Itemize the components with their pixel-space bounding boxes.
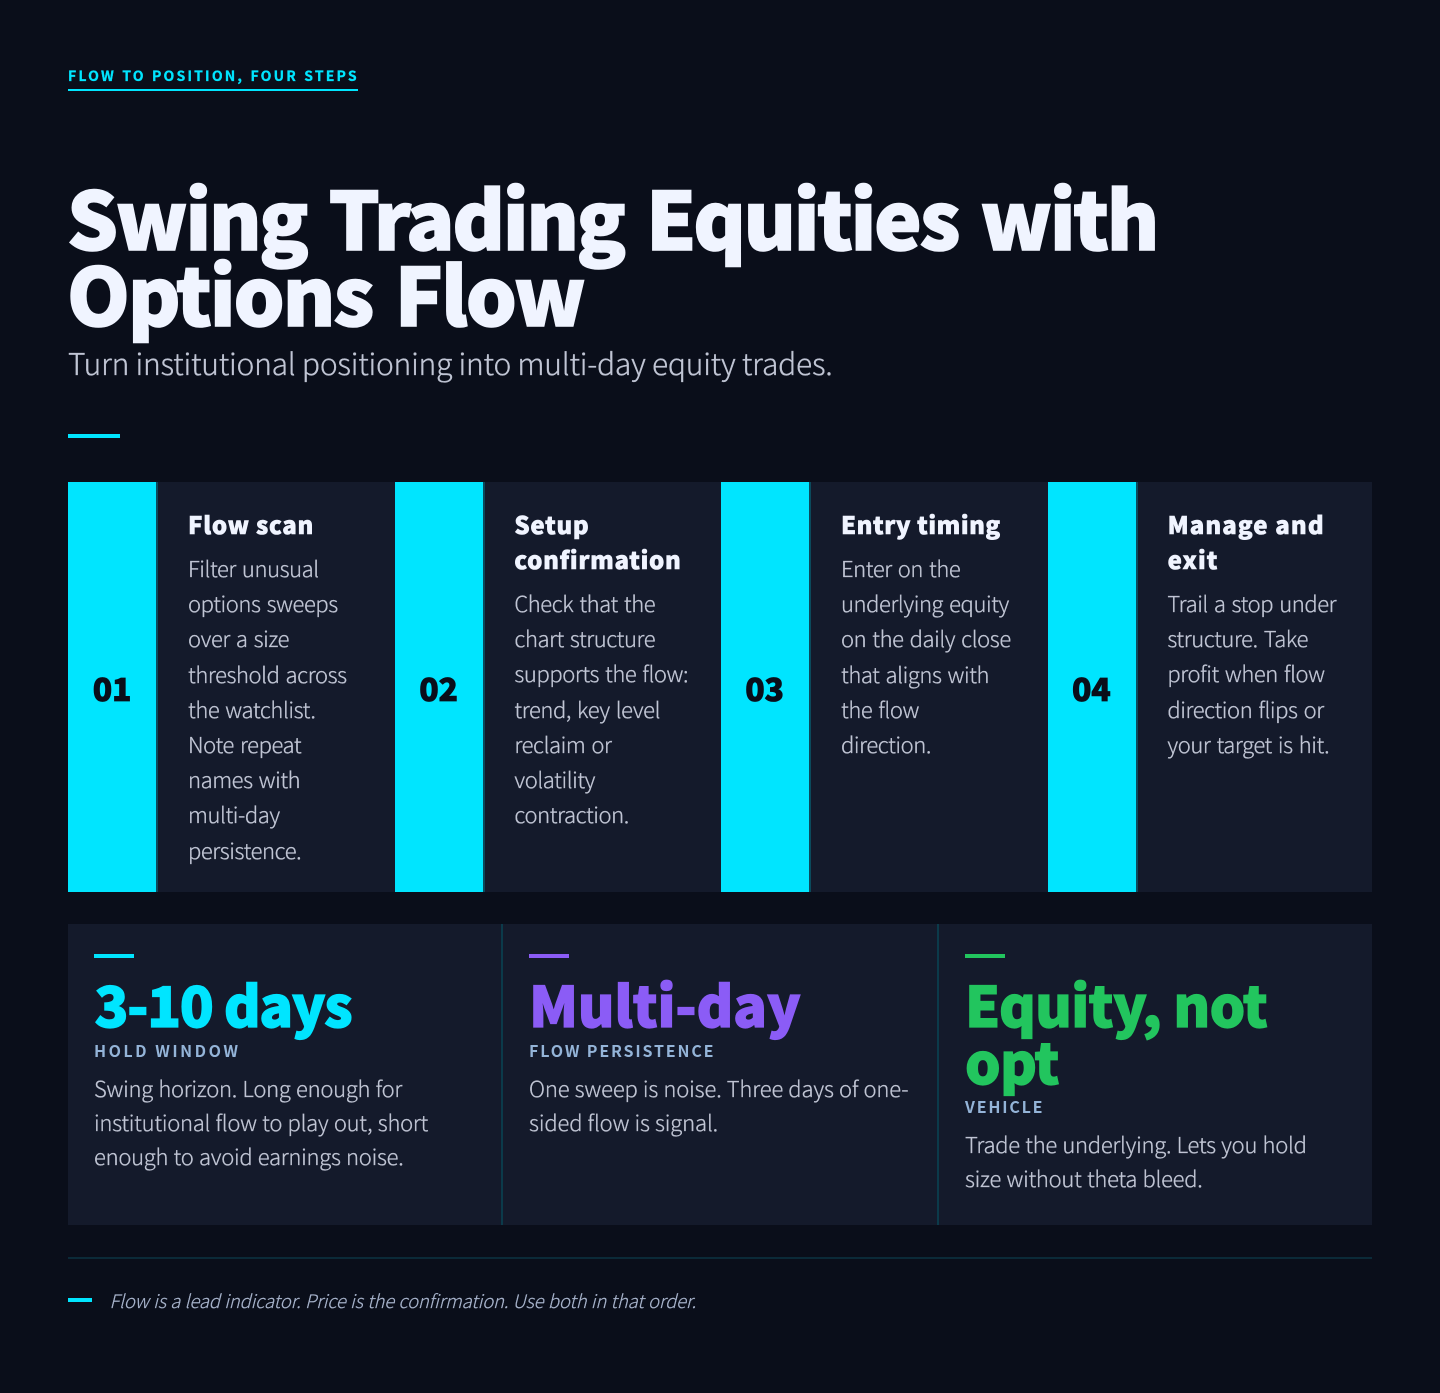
stat 3 value bbox=[965, 963, 1268, 1101]
step 2 text: reclaim or bbox=[514, 728, 612, 760]
step 4 card bbox=[1048, 482, 1372, 892]
step 2 card bbox=[395, 482, 721, 892]
step 2 text: contraction. bbox=[514, 798, 629, 830]
step 2 text: chart structure bbox=[514, 622, 655, 654]
step 1 heading: Flow scan bbox=[188, 506, 314, 541]
step 1 text: persistence. bbox=[188, 834, 301, 866]
step 4 text: profit when flow bbox=[1167, 657, 1325, 689]
step 4 heading bbox=[1168, 506, 1325, 576]
step 1 text: over a size bbox=[188, 622, 289, 654]
stat 2 text: sided flow is signal. bbox=[529, 1106, 718, 1138]
step 2 heading: Setup bbox=[514, 506, 589, 541]
title: Swing Trading Equities with bbox=[67, 158, 1157, 274]
accent rule bbox=[68, 434, 120, 438]
stat 2 label: FLOW PERSISTENCE bbox=[529, 1038, 715, 1062]
step 3 card bbox=[721, 482, 1048, 892]
eyebrow label: FLOW TO POSITION, FOUR STEPS bbox=[68, 66, 359, 86]
stat 3 text bbox=[965, 1128, 1307, 1194]
step 4 text bbox=[1167, 587, 1337, 760]
step 1 number: 01 bbox=[93, 665, 131, 711]
step 4 heading: exit bbox=[1168, 541, 1219, 576]
stat 2: flow persistence bbox=[529, 954, 908, 1138]
step 1 text: names with bbox=[188, 763, 300, 795]
stats panel bbox=[68, 924, 1372, 1225]
step 2 text: Check that the bbox=[514, 587, 655, 619]
step 2 text: supports the flow: bbox=[514, 657, 688, 689]
step 4 text: direction flips or bbox=[1167, 692, 1324, 724]
step 1 text: Filter unusual bbox=[188, 552, 319, 584]
title: Options Flow bbox=[67, 234, 584, 350]
step 1 text: the watchlist. bbox=[188, 693, 315, 725]
step 2 number bbox=[395, 482, 485, 892]
step 1 text: threshold across bbox=[188, 658, 347, 690]
step 3 text: the flow bbox=[841, 693, 919, 725]
step 2 text: volatility bbox=[514, 763, 595, 795]
step 1 text: Note repeat bbox=[188, 728, 301, 760]
stat 1 value: 3-10 days bbox=[94, 963, 351, 1044]
step 1 number bbox=[68, 482, 158, 892]
step 1 text bbox=[188, 552, 347, 866]
step 4 text: structure. Take bbox=[1167, 622, 1308, 654]
step 4 text: Trail a stop under bbox=[1167, 587, 1336, 619]
step 2 heading: confirmation bbox=[514, 541, 681, 576]
step 3 text: underlying equity bbox=[841, 587, 1009, 619]
stat 1 text: enough to avoid earnings noise. bbox=[94, 1140, 403, 1172]
title bbox=[67, 158, 1157, 350]
step 3 heading: Entry timing bbox=[841, 506, 1001, 541]
step 2 heading bbox=[514, 506, 681, 576]
stat 2 text bbox=[529, 1072, 908, 1138]
stat 3 text: Trade the underlying. Lets you hold bbox=[965, 1128, 1307, 1160]
stat 3 value: opt bbox=[965, 1020, 1059, 1101]
step 3 text: on the daily close bbox=[841, 622, 1011, 654]
step 2 text: trend, key level bbox=[514, 692, 660, 724]
stat 3 value: Equity, not bbox=[965, 963, 1267, 1044]
step 3 text: direction. bbox=[841, 728, 931, 760]
step 3 text: that aligns with bbox=[841, 658, 989, 690]
stat 3 text: size without theta bleed. bbox=[965, 1162, 1202, 1194]
stat 3 label: VEHICLE bbox=[965, 1094, 1044, 1118]
step 3 text bbox=[841, 552, 1011, 760]
stat 1 text: institutional flow to play out, short bbox=[94, 1106, 428, 1138]
step 1 text: options sweeps bbox=[188, 587, 338, 619]
step 4 number bbox=[1048, 482, 1138, 892]
step 2 number: 02 bbox=[419, 665, 458, 711]
step 1 text: multi-day bbox=[188, 798, 280, 830]
stat 2 text: One sweep is noise. Three days of one- bbox=[529, 1072, 908, 1104]
stat 2 value: Multi-day bbox=[529, 963, 800, 1044]
step 3 number bbox=[721, 482, 811, 892]
step 3 text: Enter on the bbox=[841, 552, 960, 584]
step 4 number: 04 bbox=[1072, 665, 1110, 711]
stat 1 text: Swing horizon. Long enough for bbox=[94, 1072, 402, 1104]
stat 3: vehicle bbox=[965, 954, 1307, 1194]
stat 1 text bbox=[94, 1072, 428, 1172]
step 4 heading: Manage and bbox=[1168, 506, 1325, 541]
step 2 text bbox=[514, 587, 688, 830]
stat 1 label: HOLD WINDOW bbox=[94, 1038, 240, 1062]
step 4 text: your target is hit. bbox=[1167, 728, 1329, 760]
stat 1: hold window bbox=[94, 954, 428, 1172]
footer note: Flow is a lead indicator. Price is the confirmation. Use both in that order. bbox=[110, 1288, 696, 1314]
subtitle: Turn institutional positioning into multi-day equity trades. bbox=[68, 340, 833, 384]
step 1 card bbox=[68, 482, 395, 892]
step 3 number: 03 bbox=[745, 665, 784, 711]
